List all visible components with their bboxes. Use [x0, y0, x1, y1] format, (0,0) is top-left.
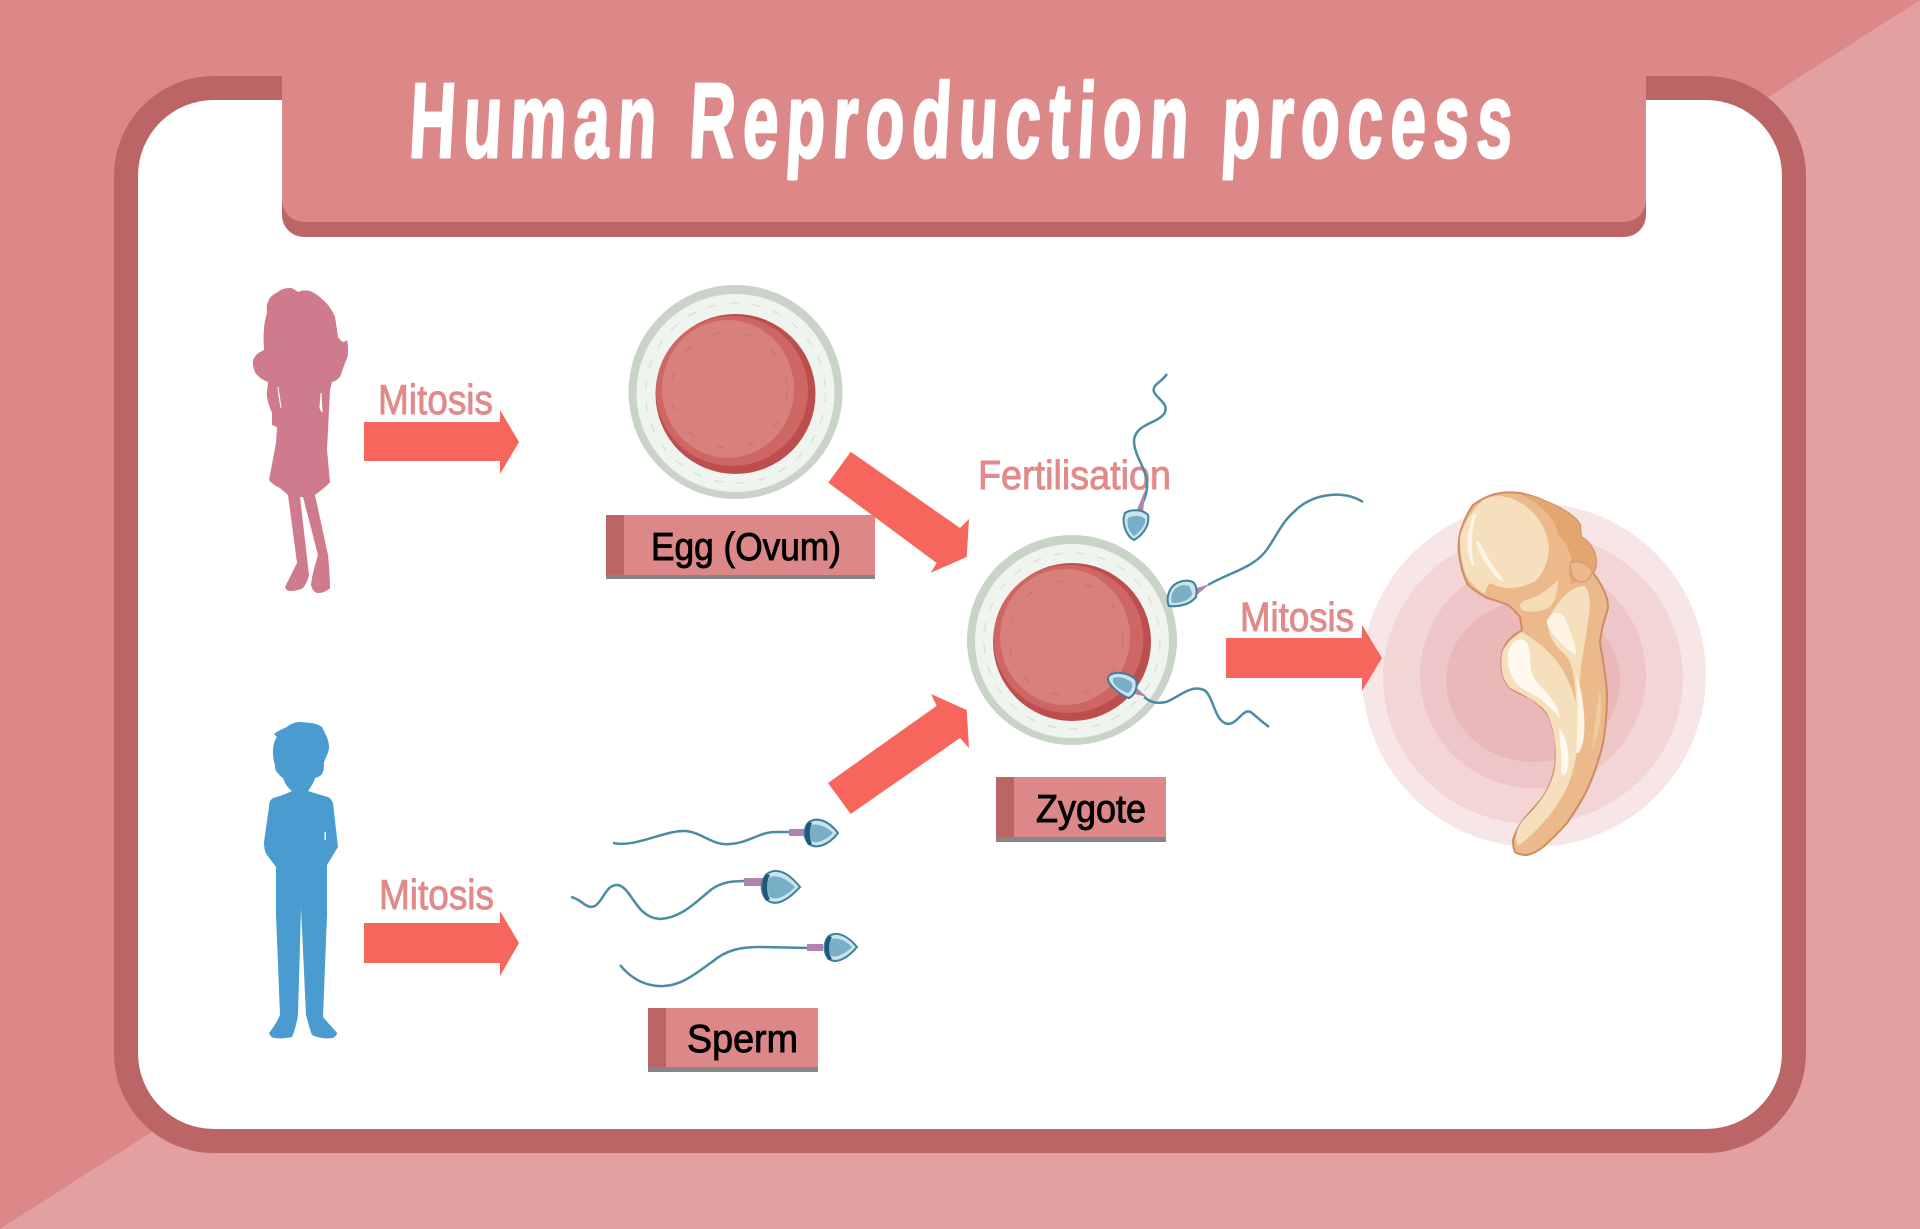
sperm: right, at zygote edge	[1168, 495, 1363, 606]
label: zygote: Zygote	[1036, 788, 1146, 831]
arrow: sperm to zygote	[828, 694, 969, 814]
embryo: lower bulge and tail	[1501, 632, 1579, 846]
label: egg: Egg (Ovum)	[651, 526, 841, 569]
label: egg	[606, 515, 875, 579]
arrow: egg to zygote	[828, 452, 969, 573]
sperm: bottom, inside zygote	[1108, 673, 1269, 727]
embryo: tail band streak	[1592, 690, 1602, 750]
embryo: spine lobe	[1544, 586, 1590, 815]
label: sperm: Sperm	[687, 1018, 798, 1061]
icon: female silhouette	[253, 288, 348, 593]
embryo: spine streak	[1576, 676, 1585, 753]
embryo: hindbrain lobe	[1570, 562, 1592, 582]
zygote cell	[967, 535, 1177, 745]
arrow: male to sperm	[364, 871, 519, 976]
sperm: lower	[620, 934, 857, 986]
title: Human Reproduction process	[407, 61, 1516, 180]
sperm: upper	[613, 820, 838, 846]
panel: white content card	[114, 76, 1806, 1153]
embryo: bulge highlight	[1508, 639, 1560, 718]
embryo: tail highlight	[1559, 728, 1568, 775]
embryo glow	[1362, 503, 1706, 847]
embryo: head highlight left	[1467, 514, 1476, 566]
arrow: zygote to embryo	[1226, 594, 1382, 691]
arrow: female to egg	[364, 376, 519, 474]
embryo: dark upper back	[1520, 494, 1596, 584]
label: zygote	[996, 777, 1166, 842]
sperm: top, approaching zygote	[1124, 374, 1167, 540]
sperm: middle	[571, 871, 800, 919]
label: mitosis: Mitosis	[379, 871, 494, 918]
label: fertilisation: Fertilisation	[978, 452, 1171, 498]
embryo: head lobe	[1460, 496, 1549, 593]
label: mitosis: Mitosis	[1240, 594, 1354, 640]
egg cell	[628, 285, 842, 499]
embryo: head highlight main	[1476, 541, 1503, 582]
label: mitosis: Mitosis	[378, 376, 493, 423]
title banner	[282, 0, 1646, 237]
embryo: mid lobe	[1520, 580, 1558, 612]
embryo	[1459, 492, 1608, 855]
label: sperm	[648, 1008, 818, 1072]
embryo: spine lobe highlight	[1547, 613, 1576, 655]
sperm group	[571, 820, 857, 986]
icon: male silhouette	[264, 722, 338, 1038]
